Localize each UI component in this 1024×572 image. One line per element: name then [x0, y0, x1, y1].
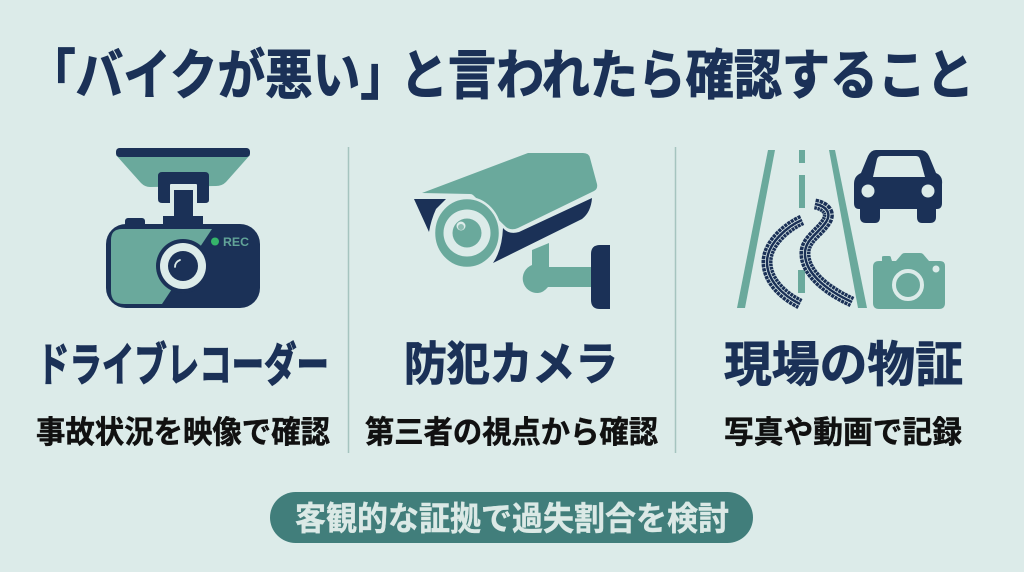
skid mark 1 [767, 220, 802, 304]
icon: car [854, 150, 942, 223]
callout: 客観的な証拠で過失割合を検討 [295, 500, 729, 537]
skid mark 2 [805, 204, 852, 302]
title [28, 46, 974, 106]
icon: road with skid marks [737, 150, 945, 309]
heading: security camera: 防犯カメラ [404, 338, 618, 390]
text: check accident footage: 事故状況を映像で確認 [36, 415, 330, 450]
title: 「バイクが悪い」 [28, 46, 408, 106]
heading: drive recorder: ドライブレコーダー [37, 339, 329, 391]
heading: on-site evidence: 現場の物証 [724, 339, 963, 392]
text: record photos and video: 写真や動画で記録 [724, 415, 962, 450]
icon: dash camera: REC [223, 235, 249, 249]
icon: security camera [414, 153, 610, 309]
icon: photo camera [873, 253, 945, 309]
callout [270, 492, 753, 543]
icon: dash camera [106, 148, 260, 308]
text: third party viewpoint: 第三者の視点から確認 [365, 415, 658, 450]
